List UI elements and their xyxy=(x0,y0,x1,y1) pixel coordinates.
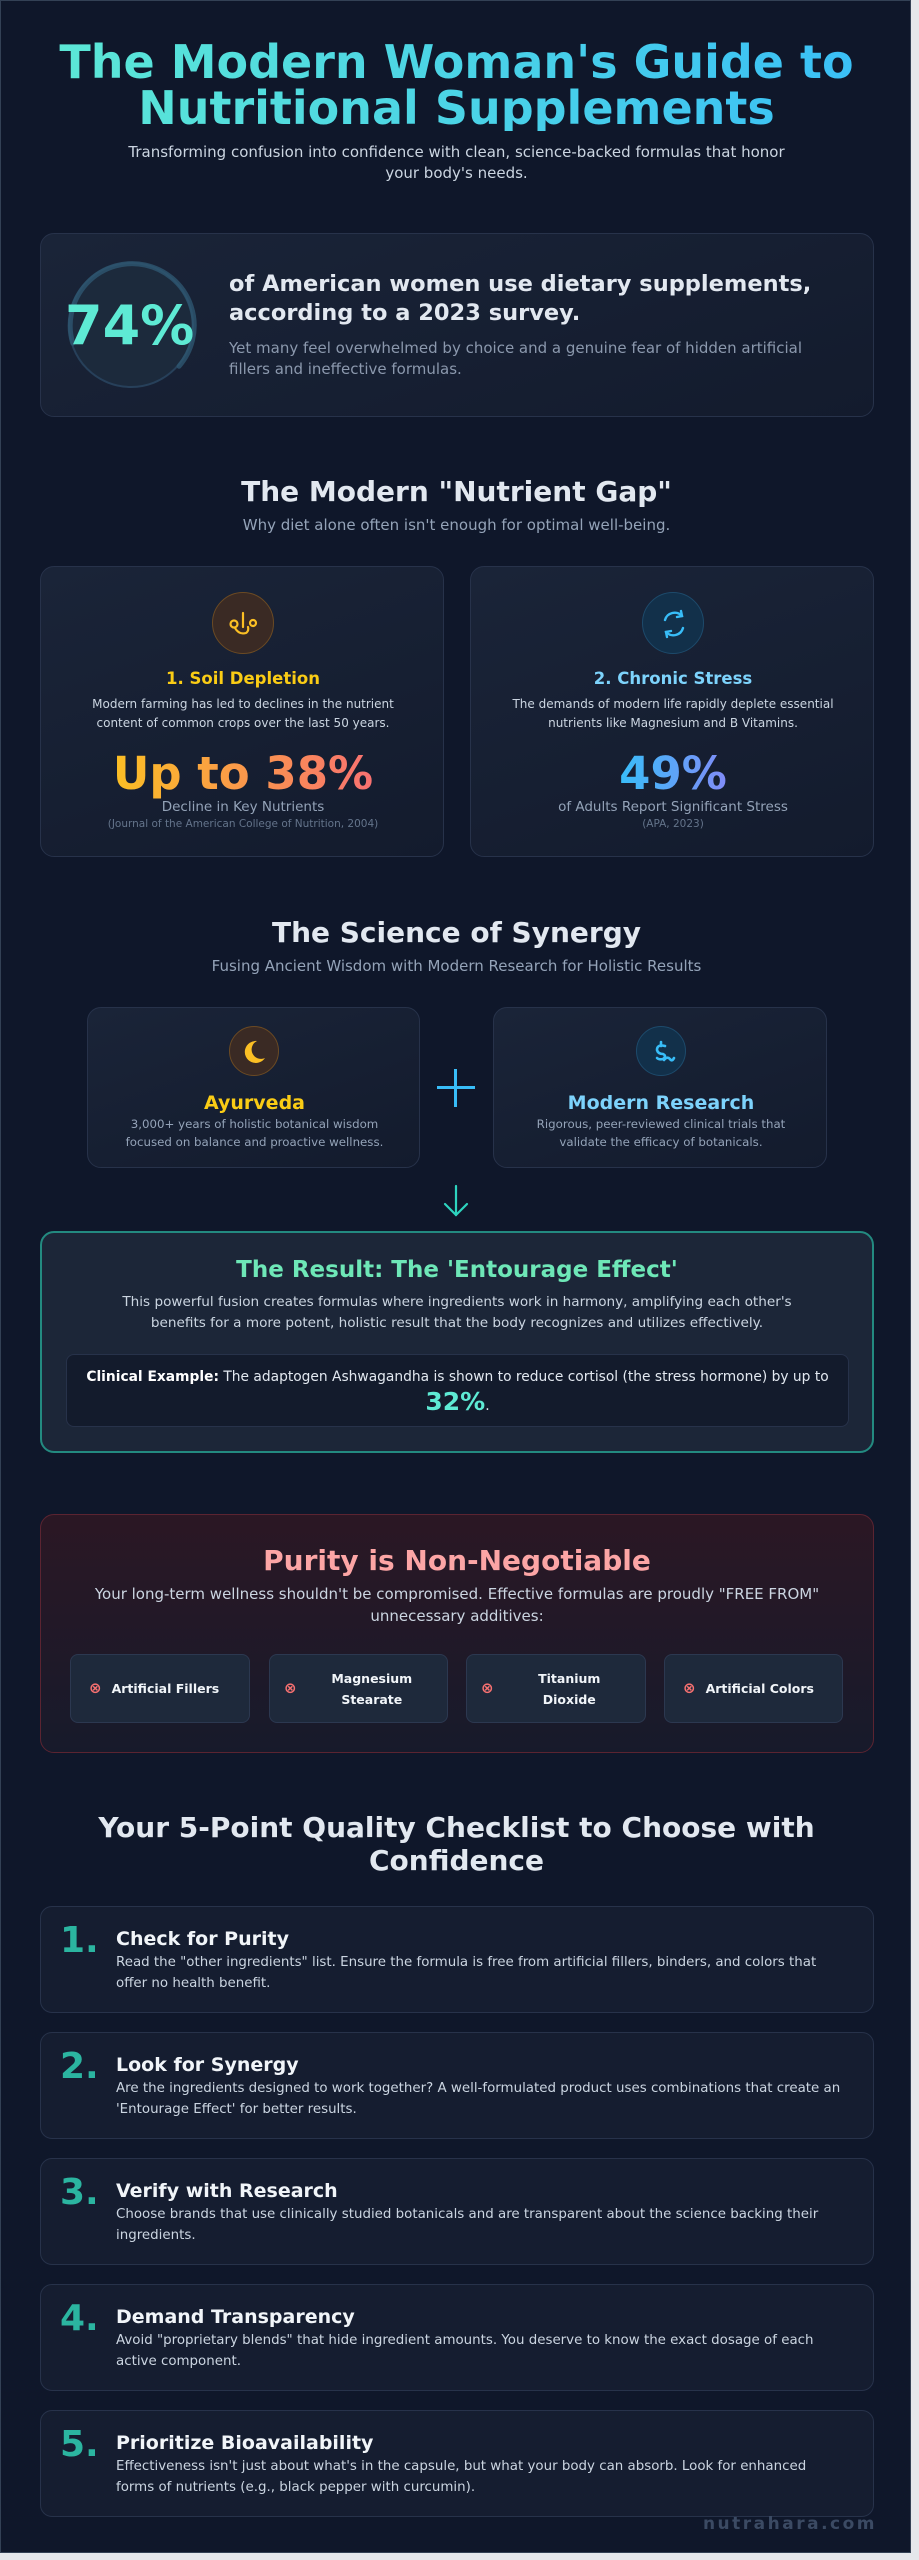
stat label: of Adults Report Significant Stress xyxy=(558,799,788,815)
card title: Modern Research xyxy=(568,1092,754,1114)
chip: artificial fillers xyxy=(70,1654,250,1723)
checklist item 4: 4. xyxy=(60,2298,99,2339)
chip: titanium dioxide: Titanium xyxy=(538,1670,600,1686)
title: The Modern Woman's Guide to xyxy=(59,35,854,89)
source: (APA, 2023) xyxy=(642,818,704,830)
checklist item 1: 1. xyxy=(60,1920,99,1961)
result title: The Result: The 'Entourage Effect' xyxy=(236,1257,678,1283)
checklist item 3: Choose brands that use clinically studied botanicals and are transparent about the science backing their ingredients. xyxy=(116,2207,818,2243)
icon: moon xyxy=(229,1026,279,1076)
stat ring xyxy=(68,261,197,388)
title xyxy=(1,39,912,131)
icon: research xyxy=(636,1026,686,1076)
chip: artificial colors xyxy=(664,1654,843,1723)
stat label: Decline in Key Nutrients xyxy=(162,799,324,815)
chip: artificial fillers: ⊗ xyxy=(89,1679,102,1697)
panel: chronic stress xyxy=(470,566,874,857)
checklist item 2: Are the ingredients designed to work together? A well-formulated product uses combinations that create an 'Entourage Effect' for better results. xyxy=(116,2081,840,2117)
big stat: 49% xyxy=(619,747,727,800)
panel: 74% stat xyxy=(40,233,874,417)
checklist item 2: Look for Synergy xyxy=(116,2054,299,2076)
arrow down xyxy=(444,1184,468,1216)
chip: artificial colors: Artificial Colors xyxy=(706,1681,814,1696)
subheading: Why diet alone often isn't enough for optimal well-being. xyxy=(243,516,670,534)
card text: Modern farming has led to declines in the nutrient content of common crops over the last 50 years. xyxy=(92,697,394,730)
panel: soil depletion xyxy=(40,566,444,857)
chip: titanium dioxide xyxy=(466,1654,646,1723)
checklist item 4: Avoid "proprietary blends" that hide ingredient amounts. You deserve to know the exact dosage of each active component. xyxy=(116,2333,814,2369)
icon: cycle xyxy=(642,592,704,654)
icon: plus xyxy=(437,1069,475,1107)
panel: ayurveda xyxy=(87,1007,420,1168)
card title: 1. Soil Depletion xyxy=(166,669,320,688)
checklist item 3: Verify with Research xyxy=(116,2180,338,2202)
chip: titanium dioxide: ⊗ xyxy=(481,1679,494,1697)
checklist item 5: Prioritize Bioavailability xyxy=(116,2432,373,2454)
stat number: 74% xyxy=(65,294,194,357)
subheading: Fusing Ancient Wisdom with Modern Research for Holistic Results xyxy=(212,957,701,975)
heading: synergy: The Science of Synergy xyxy=(272,916,641,949)
source: (Journal of the American College of Nutrition, 2004) xyxy=(108,818,378,830)
card title: Ayurveda xyxy=(204,1092,305,1114)
purity title: Purity is Non-Negotiable xyxy=(263,1544,651,1577)
result text: This powerful fusion creates formulas where ingredients work in harmony, amplifying each other's benefits for a more potent, holistic result that the body recognizes and utilizes effectively. xyxy=(122,1294,792,1331)
chip: artificial fillers: Artificial Fillers xyxy=(112,1681,219,1696)
checklist item 1: Check for Purity xyxy=(116,1928,289,1950)
chip: titanium dioxide: Dioxide xyxy=(543,1692,596,1706)
checklist item 4 xyxy=(40,2284,874,2391)
checklist item 4: Demand Transparency xyxy=(116,2306,355,2328)
checklist item 3: 3. xyxy=(60,2172,99,2213)
checklist item 5: Effectiveness isn't just about what's in the capsule, but what your body can absorb. Look for enhanced forms of nutrients (e.g., black pepper with curcumin). xyxy=(116,2459,806,2495)
clinical example box: Clinical Example: The adaptogen Ashwagandha is shown to reduce cortisol (the stress hormone) by up to xyxy=(86,1369,829,1385)
checklist item 2 xyxy=(40,2032,874,2139)
watermark: nutrahara.com xyxy=(703,2514,877,2534)
clinical example box: 32%. xyxy=(425,1387,490,1416)
chip: artificial colors: ⊗ xyxy=(683,1679,696,1697)
card text: The demands of modern life rapidly deplete essential nutrients like Magnesium and B Vitamins. xyxy=(512,697,834,730)
card title: 2. Chronic Stress xyxy=(594,669,752,688)
subtitle: Transforming confusion into confidence with clean, science-backed formulas that honor your body's needs. xyxy=(128,143,785,182)
heading: nutrient gap: The Modern "Nutrient Gap" xyxy=(241,475,672,508)
panel: entourage effect xyxy=(40,1231,874,1453)
checklist item 1 xyxy=(40,1906,874,2013)
clinical example box xyxy=(66,1354,849,1427)
icon: sprout xyxy=(212,592,274,654)
card text: Rigorous, peer-reviewed clinical trials that validate the efficacy of botanicals. xyxy=(537,1117,785,1149)
checklist item 3 xyxy=(40,2158,874,2265)
stat heading: of American women use dietary supplements, according to a 2023 survey. xyxy=(229,271,811,326)
chip: magnesium stearate: Stearate xyxy=(341,1692,402,1706)
title: Nutritional Supplements xyxy=(138,81,775,135)
checklist item 5: 5. xyxy=(60,2424,99,2465)
panel: purity xyxy=(40,1514,874,1753)
checklist item 2: 2. xyxy=(60,2046,99,2087)
heading: checklist: Your 5-Point Quality Checklist to Choose with Confidence xyxy=(98,1811,815,1877)
big stat: Up to 38% xyxy=(113,747,373,800)
chip: magnesium stearate: Magnesium xyxy=(331,1670,412,1686)
card text: 3,000+ years of holistic botanical wisdom focused on balance and proactive wellness. xyxy=(126,1117,383,1149)
stat text: Yet many feel overwhelmed by choice and a genuine fear of hidden artificial fillers and ineffective formulas. xyxy=(229,339,802,378)
chip: magnesium stearate xyxy=(269,1654,448,1723)
chip: magnesium stearate: ⊗ xyxy=(284,1679,297,1697)
panel: modern research xyxy=(493,1007,827,1168)
checklist item 1: Read the "other ingredients" list. Ensure the formula is free from artificial fillers, binders, and colors that offer no health benefit. xyxy=(116,1955,816,1991)
checklist item 5 xyxy=(40,2410,874,2517)
purity text: Your long-term wellness shouldn't be compromised. Effective formulas are proudly "FREE FROM" unnecessary additives: xyxy=(95,1585,819,1625)
